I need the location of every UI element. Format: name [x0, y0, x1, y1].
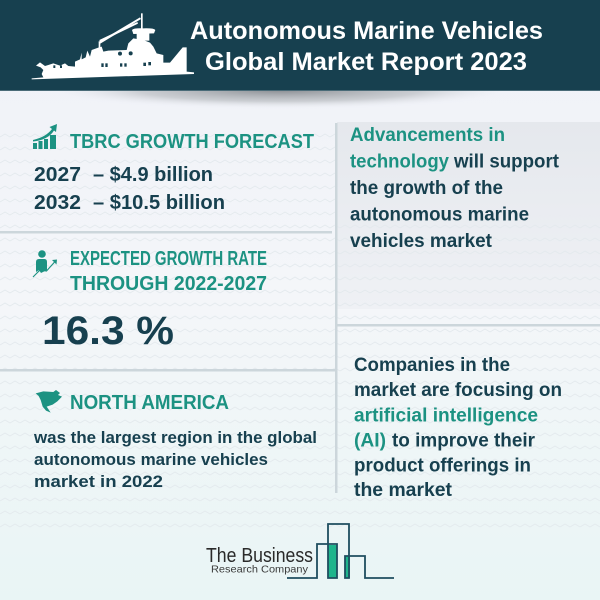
heading: TBRC growth forecast: TBRC GROWTH FORECAST: [70, 131, 314, 153]
callout: advancements in technology: the growth of the: [350, 177, 503, 199]
icon: rising bar chart: [33, 124, 57, 149]
title: Global Market Report 2023: [205, 48, 527, 76]
section dividers: [0, 123, 600, 493]
heading: expected growth rate: [70, 248, 267, 295]
icon: person with growth arrow: [33, 250, 57, 277]
panel: North America: [33, 390, 317, 491]
callout: advancements in technology: vehicles market: [350, 230, 492, 252]
callout: artificial intelligence: the market: [354, 479, 453, 501]
title: Autonomous Marine Vehicles: [190, 17, 543, 45]
callout: advancements in technology: will support: [453, 150, 559, 172]
heading: expected growth rate: EXPECTED GROWTH RATE: [70, 248, 267, 270]
body text: market in 2022: [34, 473, 163, 491]
callout: artificial intelligence: product offerings in: [354, 454, 531, 476]
forecast values: [34, 164, 225, 214]
logo mark: building skyline: [287, 524, 394, 578]
panel: TBRC growth forecast: [33, 124, 314, 214]
panel: expected growth rate: [33, 248, 267, 353]
callout: artificial intelligence: Companies in the: [354, 354, 510, 376]
callout: advancements in technology: Advancements in: [350, 124, 505, 146]
logo wordmark: Research Company: [211, 564, 309, 576]
callout: advancements in technology: [350, 124, 559, 252]
callout: artificial intelligence: [354, 354, 562, 501]
icon: North America map: [36, 390, 62, 413]
forecast values: – $10.5 billion: [93, 192, 225, 214]
forecast values: 2032: [34, 192, 81, 214]
heading: North America: NORTH AMERICA: [70, 392, 229, 414]
callout: artificial intelligence: to improve their: [392, 430, 535, 452]
panel: title banner: [0, 0, 600, 91]
callout: advancements in technology: autonomous marine: [350, 204, 529, 226]
callout: artificial intelligence: (AI): [354, 430, 386, 452]
forecast values: 2027: [34, 164, 81, 186]
header shadow: [45, 71, 515, 109]
forecast values: – $4.9 billion: [93, 164, 213, 186]
body text: autonomous marine vehicles: [34, 451, 268, 469]
callout: advancements in technology: technology: [350, 150, 449, 172]
heading: expected growth rate: THROUGH 2022-2027: [70, 273, 267, 295]
logo wordmark: [206, 545, 313, 576]
logo wordmark: The Business: [206, 545, 313, 567]
callout: artificial intelligence: market are focusing on: [354, 379, 562, 401]
icon: ship silhouette: [32, 13, 194, 79]
callout: artificial intelligence: artificial intelligence: [354, 404, 538, 426]
body text: [33, 429, 317, 491]
statistic: 16.3 percent: 16.3 %: [42, 309, 174, 353]
body text: was the largest region in the global: [33, 429, 317, 447]
logo: The Business Research Company: [206, 524, 394, 578]
title: [190, 17, 543, 76]
panel: shaded technology callout background: [337, 122, 600, 309]
